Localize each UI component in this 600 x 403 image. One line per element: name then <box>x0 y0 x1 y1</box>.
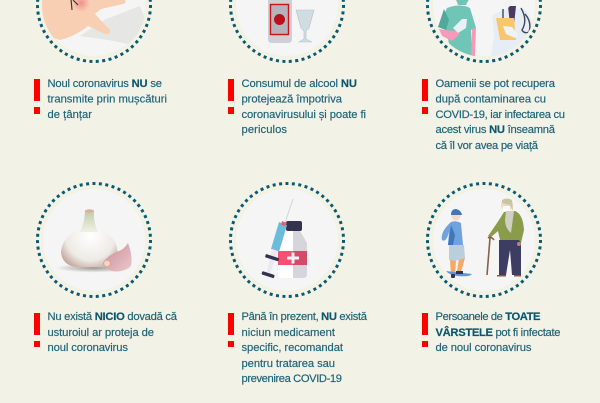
text block: că îl vor avea pe viață <box>436 140 539 152</box>
icon: garlic <box>38 184 150 296</box>
text block: de noul coronavirus <box>436 342 532 354</box>
text block: prevenirea COVID-19 <box>242 373 342 385</box>
text block: protejează împotriva <box>242 94 343 106</box>
text block <box>436 78 565 152</box>
panel: mosquito bites <box>34 0 167 121</box>
icon: bottle and glass <box>230 0 344 62</box>
text block <box>242 78 366 136</box>
exclamation mark <box>34 313 40 347</box>
text block: noul coronavirus <box>48 342 128 354</box>
text block: Oamenii se pot recupera <box>436 78 556 90</box>
text block: COVID-19, iar infectarea cu <box>436 109 565 121</box>
icon: hand with mosquito <box>38 0 150 62</box>
icon: patient and doctor <box>428 0 540 62</box>
exclamation mark <box>34 79 40 114</box>
text block: coronavirusului și poate fi <box>242 109 366 121</box>
text block: usturoiul ar proteja de <box>48 327 154 339</box>
text block: Consumul de alcool NU <box>242 78 357 90</box>
panel: recovery <box>422 0 565 152</box>
text block <box>48 311 178 354</box>
text block: de țânțar <box>48 109 92 121</box>
text block: Până în prezent, NU există <box>242 311 368 323</box>
exclamation mark <box>422 313 428 347</box>
text block: specific, recomandat <box>242 342 344 354</box>
text block: transmite prin mușcături <box>48 94 167 106</box>
text block: pentru tratarea sau <box>242 358 335 370</box>
text block <box>436 311 560 354</box>
text block: după contaminarea cu <box>436 94 546 106</box>
text block: Persoanele de TOATE <box>436 311 541 323</box>
text block <box>48 78 167 121</box>
icon: young person and elder <box>428 184 540 296</box>
icon: vial and syringe <box>230 184 344 296</box>
text block: periculos <box>242 124 287 136</box>
panel: alcohol <box>228 0 366 136</box>
text block: acest virus NU înseamnă <box>436 124 556 136</box>
panel: all ages <box>422 184 560 354</box>
text block <box>242 311 368 385</box>
text block: Noul coronavirus NU se <box>48 78 162 90</box>
text block: niciun medicament <box>242 327 336 339</box>
exclamation mark <box>228 313 234 347</box>
exclamation mark <box>422 79 428 114</box>
exclamation mark <box>228 79 234 114</box>
panel: medicine <box>228 184 368 385</box>
text block: VÂRSTELE pot fi infectate <box>436 326 560 339</box>
text block: Nu există NICIO dovadă că <box>48 311 178 323</box>
panel: garlic <box>34 184 178 354</box>
